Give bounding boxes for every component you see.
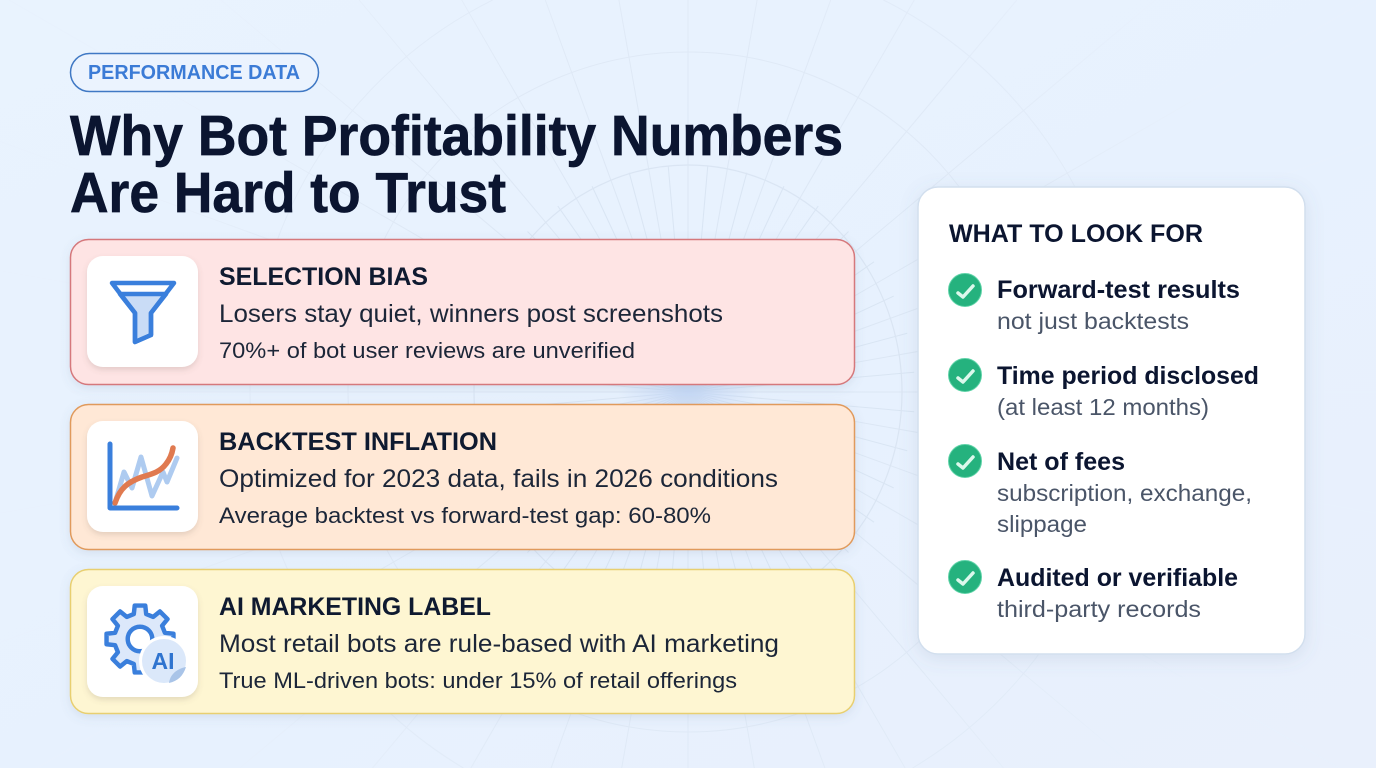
icon: funnel	[112, 283, 174, 342]
item: net of fees	[948, 444, 1252, 537]
icon: line chart	[110, 444, 177, 508]
item: audited or verifiable: Audited or verifiable	[997, 564, 1238, 592]
item: net of fees: slippage	[997, 511, 1087, 537]
item: net of fees: subscription, exchange,	[997, 480, 1252, 506]
item: forward-test results	[948, 274, 1240, 334]
title	[70, 104, 843, 225]
claim: selection bias: Losers stay quiet, winners post screenshots	[219, 300, 723, 328]
claim: AI marketing label: Most retail bots are rule-based with AI marketing	[219, 630, 779, 658]
item: audited or verifiable	[948, 560, 1238, 622]
item: time period disclosed: Time period disclosed	[997, 362, 1259, 390]
item: audited or verifiable: third-party records	[997, 596, 1201, 622]
stat: backtest inflation: Average backtest vs forward-test gap: 60-80%	[219, 503, 711, 528]
icon: gear with AI badge: AI	[152, 648, 174, 674]
heading: backtest inflation: BACKTEST INFLATION	[219, 428, 497, 456]
title: Why Bot Profitability Numbers	[70, 104, 843, 168]
panel heading: WHAT TO LOOK FOR	[949, 220, 1203, 248]
claim: backtest inflation: Optimized for 2023 data, fails in 2026 conditions	[219, 465, 778, 493]
item: time period disclosed	[948, 358, 1259, 420]
panel: AI marketing label	[70, 570, 854, 714]
stat: selection bias: 70%+ of bot user reviews are unverified	[219, 338, 635, 363]
title: Are Hard to Trust	[70, 161, 506, 225]
panel: what to look for	[918, 187, 1305, 654]
panel: backtest inflation	[70, 404, 854, 550]
item: forward-test results: Forward-test results	[997, 276, 1240, 304]
stat: AI marketing label: True ML-driven bots: under 15% of retail offerings	[219, 668, 737, 693]
heading: AI marketing label: AI MARKETING LABEL	[219, 593, 491, 621]
icon: gear with AI badge	[107, 606, 189, 686]
tag pill: PERFORMANCE DATA	[88, 62, 300, 84]
panel: selection bias	[70, 240, 854, 384]
item: net of fees: Net of fees	[997, 448, 1125, 476]
item: time period disclosed: (at least 12 months)	[997, 394, 1209, 420]
item: forward-test results: not just backtests	[997, 308, 1189, 334]
tag pill	[70, 54, 318, 92]
heading: selection bias: SELECTION BIAS	[219, 263, 428, 291]
